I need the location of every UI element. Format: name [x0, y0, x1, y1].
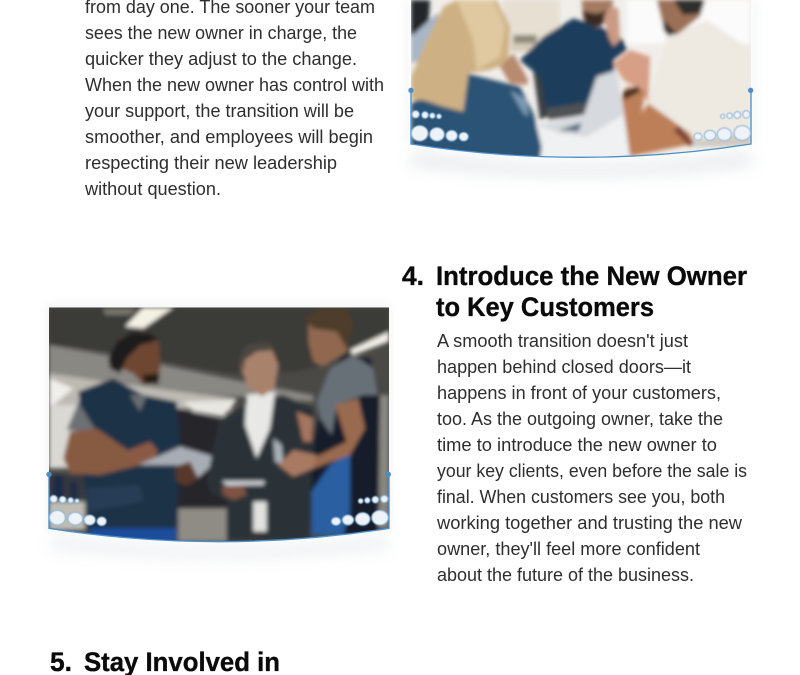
text block: step 3 body: your support, the transition will be — [85, 100, 354, 121]
text block: step 4 body: final. When customers see you, both — [437, 486, 725, 507]
text block: step 4 body — [436, 330, 747, 585]
text block: step 3 body: sees the new owner in charge, the — [85, 22, 357, 43]
text block: step 4 body: happens in front of your customers, — [437, 382, 721, 403]
text block: step 3 body: smoother, and employees will begin — [85, 126, 373, 147]
heading: step 4: Introduce the New Owner — [436, 261, 747, 291]
text block: step 3 body: quicker they adjust to the change. — [85, 48, 357, 69]
text block: step 4 body: about the future of the business. — [437, 564, 694, 585]
photo: team meeting — [407, 0, 755, 177]
text block: step 3 body: without question. — [84, 178, 221, 199]
heading: step 4 — [402, 261, 747, 322]
text block: step 3 body: When the new owner has control with — [85, 74, 384, 95]
text block: step 4 body: time to introduce the new owner to — [437, 434, 717, 455]
text block: step 3 body — [84, 0, 384, 199]
text block: step 4 body: working together and trusting the new — [436, 512, 743, 533]
text block: step 4 body: your key clients, even before the sale is — [437, 460, 747, 481]
text block: step 4 body: too. As the outgoing owner, take the — [437, 408, 723, 429]
heading: step 4: 4. — [402, 261, 424, 291]
heading: step 4: to Key Customers — [436, 292, 654, 322]
text block: step 3 body: respecting their new leadership — [85, 152, 337, 173]
text block: step 4 body: owner, they'll feel more confident — [437, 538, 700, 559]
text block: step 4 body: happen behind closed doors—it — [437, 356, 691, 377]
text block: step 4 body: A smooth transition doesn't just — [437, 330, 688, 351]
photo: owner with mechanics — [46, 303, 391, 558]
